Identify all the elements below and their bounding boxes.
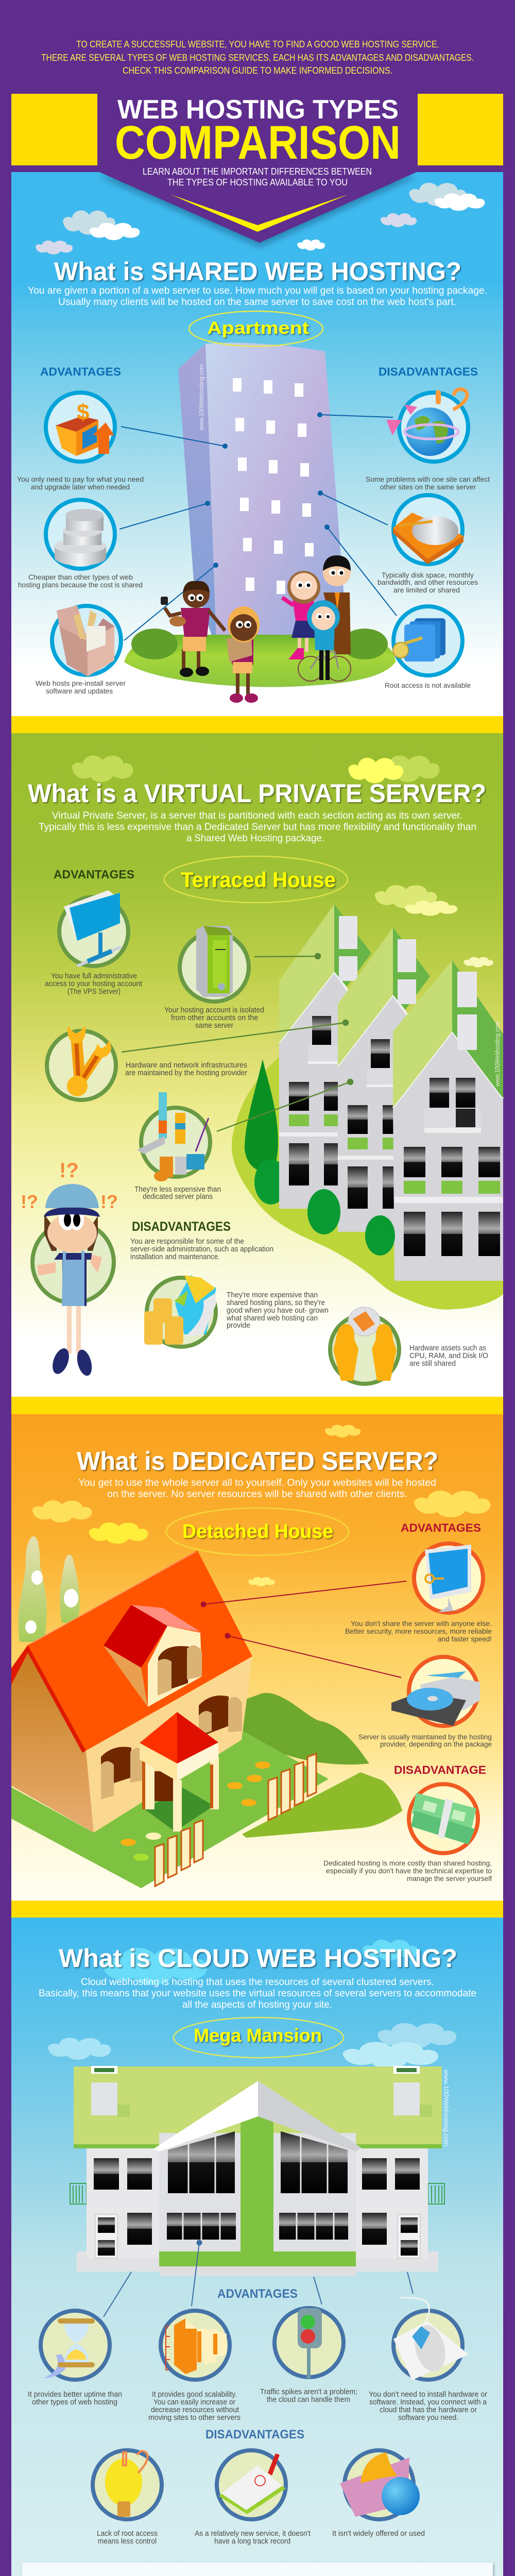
caption: what shared web hosting can — [226, 1314, 318, 1323]
yellow header block right — [418, 94, 503, 165]
icon: key and lock — [393, 606, 462, 675]
caption — [17, 475, 144, 491]
caption: You only need to pay for what you need — [17, 475, 144, 483]
caption: good when you have out- grown — [227, 1306, 329, 1315]
icon: hard disk — [393, 495, 464, 564]
section: cloud web hosting — [11, 1918, 503, 2576]
leader lines — [104, 2240, 413, 2317]
detached house label — [166, 1508, 349, 1555]
caption: are limited or shared — [393, 586, 460, 594]
icon: wrenches — [47, 1026, 116, 1100]
caption: Some problems with one site can affect — [366, 475, 490, 483]
caption — [134, 1185, 221, 1201]
advantages heading: ADVANTAGES — [217, 2287, 298, 2301]
icon: hourglass — [41, 2311, 110, 2380]
leader lines — [119, 413, 397, 640]
disadvantages heading: DISADVANTAGES — [205, 2428, 304, 2442]
caption: provider, depending on the package — [380, 1740, 492, 1748]
icon: network folder — [59, 890, 128, 966]
caption: access to your hosting account — [45, 979, 143, 988]
intro text: CHECK THIS COMPARISON GUIDE TO MAKE INFORMED DECISIONS. — [123, 65, 392, 76]
caption: same server — [195, 1021, 233, 1030]
caption — [323, 1859, 492, 1883]
icon: server — [180, 926, 249, 1002]
icon: two people sharing — [330, 1307, 399, 1384]
character: puzzled worker: !? — [100, 1191, 118, 1212]
caption — [28, 2390, 122, 2406]
caption — [45, 972, 143, 996]
caption: hosting plans because the cost is shared — [18, 581, 143, 589]
caption: You don't need to install hardware or — [369, 2390, 487, 2399]
caption: and upgrade later when needed — [31, 483, 130, 491]
icon: cd drive — [391, 1657, 480, 1726]
character: puzzled worker: !? — [59, 1159, 79, 1182]
description: You get to use the whole server all to yourself. Only your websites will be hosted — [78, 1478, 436, 1488]
description: Cloud webhosting is hosting that uses the resources of several clustered servers. — [81, 1977, 434, 1988]
terraced houses illustration — [232, 904, 503, 1310]
description: a Shared Web Hosting package. — [186, 833, 324, 844]
description: all the aspects of hosting your site. — [182, 1999, 332, 2010]
description: Virtual Private Server, is a server that is partitioned with each section acting as its own server. — [52, 810, 462, 821]
yellow chevron — [170, 194, 349, 232]
caption: They're less expensive than — [134, 1185, 221, 1194]
mansion illustration — [70, 2066, 444, 2276]
icon: folder and globe — [340, 2450, 420, 2519]
caption: cloud that has the hardware or — [380, 2405, 477, 2414]
caption — [195, 2529, 311, 2546]
watermark: www.100Webhosting.com — [442, 2069, 450, 2146]
caption — [369, 2390, 487, 2422]
section: dedicated server — [11, 1414, 503, 1901]
mega mansion label — [174, 2018, 344, 2058]
clouds — [48, 1940, 456, 2069]
description: Usually many clients will be hosted on the same server to save cost on the web host's part. — [58, 297, 456, 308]
icon: scaling bars — [161, 2311, 230, 2380]
character: man in suit — [323, 555, 351, 654]
caption: You can easily increase or — [153, 2398, 235, 2406]
caption: software and updates — [46, 687, 113, 695]
caption — [409, 1344, 488, 1368]
blue panel — [11, 1918, 503, 2576]
disadvantages heading: DISADVANTAGES — [132, 1219, 231, 1234]
character: puzzled worker: !? — [21, 1191, 38, 1212]
icon: traffic light — [274, 2308, 344, 2379]
caption: especially if you don't have the technical expertise to — [326, 1867, 492, 1875]
caption — [97, 2529, 158, 2546]
heading: What is CLOUD WEB HOSTING? — [59, 1944, 457, 1973]
terraced house label: Terraced House — [181, 868, 336, 892]
icon: box — [52, 605, 121, 676]
caption: other sites on the same server — [380, 483, 476, 491]
caption: bandwidth, and other resources — [377, 578, 478, 586]
caption: You don't share the server with anyone else. — [351, 1619, 492, 1628]
caption: software. Instead, you connect with a — [369, 2398, 487, 2406]
watermark: www.100Webhosting.com — [493, 1021, 501, 1087]
character: woman in pink — [282, 571, 320, 659]
subtitle: LEARN ABOUT THE IMPORTANT DIFFERENCES BETWEEN — [143, 166, 372, 177]
caption: Root access is not available — [385, 681, 471, 689]
caption — [377, 571, 478, 594]
apartment label: Apartment — [207, 318, 309, 338]
yellow band — [11, 1397, 503, 1414]
caption — [260, 2387, 357, 2404]
caption: dedicated server plans — [143, 1192, 213, 1201]
title line two: COMPARISON — [115, 116, 401, 169]
caption: manage the server yourself — [407, 1874, 492, 1883]
caption: Hardware assets such as — [409, 1344, 486, 1352]
apartment label — [189, 311, 323, 346]
caption: Typically disk space, monthly — [382, 571, 474, 579]
caption: Better security, more resources, more reliable — [345, 1627, 492, 1635]
caption — [148, 2390, 241, 2422]
subtitle: THE TYPES OF HOSTING AVAILABLE TO YOU — [167, 177, 348, 188]
caption: other types of web hosting — [32, 2398, 117, 2406]
icon: mouse — [393, 2298, 469, 2380]
icon: money box: $ — [77, 400, 89, 425]
caption — [125, 1061, 247, 1077]
description — [39, 1977, 476, 2010]
caption: the cloud can handle them — [267, 2395, 350, 2404]
icon: globe — [386, 389, 468, 462]
description — [28, 285, 487, 308]
caption — [366, 475, 490, 491]
caption: decrease resources without — [151, 2405, 239, 2414]
heading: What is SHARED WEB HOSTING? — [54, 257, 461, 286]
heading: What is a VIRTUAL PRIVATE SERVER? — [28, 779, 486, 808]
watermark: www.100Webhosting.com — [198, 364, 205, 431]
yellow band — [11, 716, 503, 733]
description — [39, 810, 476, 844]
character: woman with folder — [227, 606, 260, 703]
building — [178, 343, 348, 651]
caption: have a long track record — [214, 2537, 290, 2546]
caption: Web hosts pre-install server — [36, 679, 126, 687]
icon: stacked disks — [46, 500, 115, 569]
caption: Traffic spikes aren't a problem; — [260, 2387, 357, 2396]
caption: Hardware and network infrastructures — [126, 1061, 247, 1070]
purple chevron banner — [99, 172, 417, 243]
caption: moving sites to other servers — [148, 2413, 241, 2422]
text: installation and maintenance. — [130, 1252, 220, 1261]
description: on the server. No server resources will be shared with other clients. — [107, 1489, 407, 1500]
title line one: WEB HOSTING TYPES — [117, 95, 399, 125]
caption: It provides good scalability. — [152, 2390, 237, 2399]
conclusion panel — [22, 2563, 493, 2576]
disadvantage heading: DISADVANTAGE — [394, 1764, 486, 1776]
terraced house label — [164, 856, 348, 903]
caption — [18, 573, 143, 589]
description: Typically this is less expensive than a Dedicated Server but has more flexibility and functionality than — [39, 822, 476, 833]
icon: money box — [46, 393, 115, 462]
icon: monitor with key — [414, 1544, 483, 1613]
description: You are given a portion of a web server to use. How much you will get is based on your hosting package. — [28, 285, 487, 296]
clouds — [72, 755, 493, 968]
intro text: TO CREATE A SUCCESSFUL WEBSITE, YOU HAVE TO FIND A GOOD WEB HOSTING SERVICE. — [76, 39, 439, 49]
disadvantages heading: DISADVANTAGES — [379, 365, 478, 378]
advantages heading: ADVANTAGES — [54, 868, 134, 881]
caption: Cheaper than other types of web — [28, 573, 133, 581]
caption: shared hosting plans, so they're — [227, 1298, 325, 1307]
caption: from other accounts on the — [171, 1013, 258, 1022]
caption — [226, 1291, 329, 1330]
caption — [164, 1006, 264, 1030]
heading: What is DEDICATED SERVER? — [77, 1447, 438, 1476]
orange panel — [11, 1414, 503, 1901]
character: puzzled worker — [21, 1159, 118, 1377]
caption — [36, 679, 126, 695]
icon: notebook — [217, 2450, 286, 2519]
section: virtual private server — [11, 733, 503, 1397]
caption: Dedicated hosting is more costly than shared hosting, — [323, 1859, 492, 1867]
character: kid on bicycle — [298, 600, 351, 681]
text: server-side administration, such as application — [130, 1245, 273, 1253]
caption: Lack of root access — [97, 2529, 158, 2538]
caption: As a relatively new service, it doesn't — [195, 2529, 311, 2538]
caption — [345, 1619, 492, 1643]
caption: It isn't widely offered or used — [332, 2529, 425, 2538]
green panel — [11, 733, 503, 1397]
clouds — [36, 183, 485, 255]
caption: are maintained by the hosting provider — [125, 1069, 247, 1077]
description — [78, 1478, 436, 1500]
caption: They're more expensive than — [227, 1291, 318, 1299]
leader lines — [201, 1581, 406, 1677]
caption: means less control — [98, 2537, 157, 2546]
yellow band — [11, 1901, 503, 1918]
mega mansion label: Mega Mansion — [194, 2025, 322, 2046]
sky panel — [11, 172, 503, 716]
caption: software you need. — [398, 2413, 458, 2422]
icon: light bulb — [93, 2450, 162, 2519]
detached house label: Detached House — [182, 1521, 333, 1543]
advantages heading: ADVANTAGES — [401, 1521, 481, 1534]
character: man with plug — [161, 581, 225, 677]
caption: Your hosting account is isolated — [164, 1006, 264, 1014]
caption: are still shared — [409, 1359, 456, 1368]
caption: CPU, RAM, and Disk I/O — [409, 1351, 488, 1360]
leader lines — [122, 954, 353, 1131]
intro text — [41, 39, 474, 76]
advantages heading: ADVANTAGES — [40, 365, 121, 378]
yellow header block left — [11, 94, 97, 165]
icon: money stack — [409, 1784, 478, 1853]
detached house illustration — [11, 1536, 402, 1888]
section: shared web hosting — [11, 172, 503, 716]
subtitle — [143, 166, 372, 188]
caption: Server is usually maintained by the hosting — [358, 1733, 492, 1741]
caption: You have full administrative — [51, 972, 137, 980]
ground with bushes — [124, 629, 396, 687]
icon: pie and coins — [144, 1275, 216, 1347]
icon: cost bars — [137, 1092, 210, 1181]
caption: (The VPS Server) — [67, 987, 121, 996]
caption: provide — [227, 1321, 250, 1330]
caption: It provides better uptime than — [28, 2390, 122, 2399]
text: You are responsible for some of the — [130, 1237, 244, 1246]
description: Basically, this means that your website uses the virtual resources of several servers to accommodate — [39, 1988, 476, 1999]
caption — [358, 1733, 492, 1748]
text — [130, 1237, 273, 1261]
clouds — [32, 1425, 490, 1586]
caption: and faster speed! — [438, 1635, 492, 1643]
